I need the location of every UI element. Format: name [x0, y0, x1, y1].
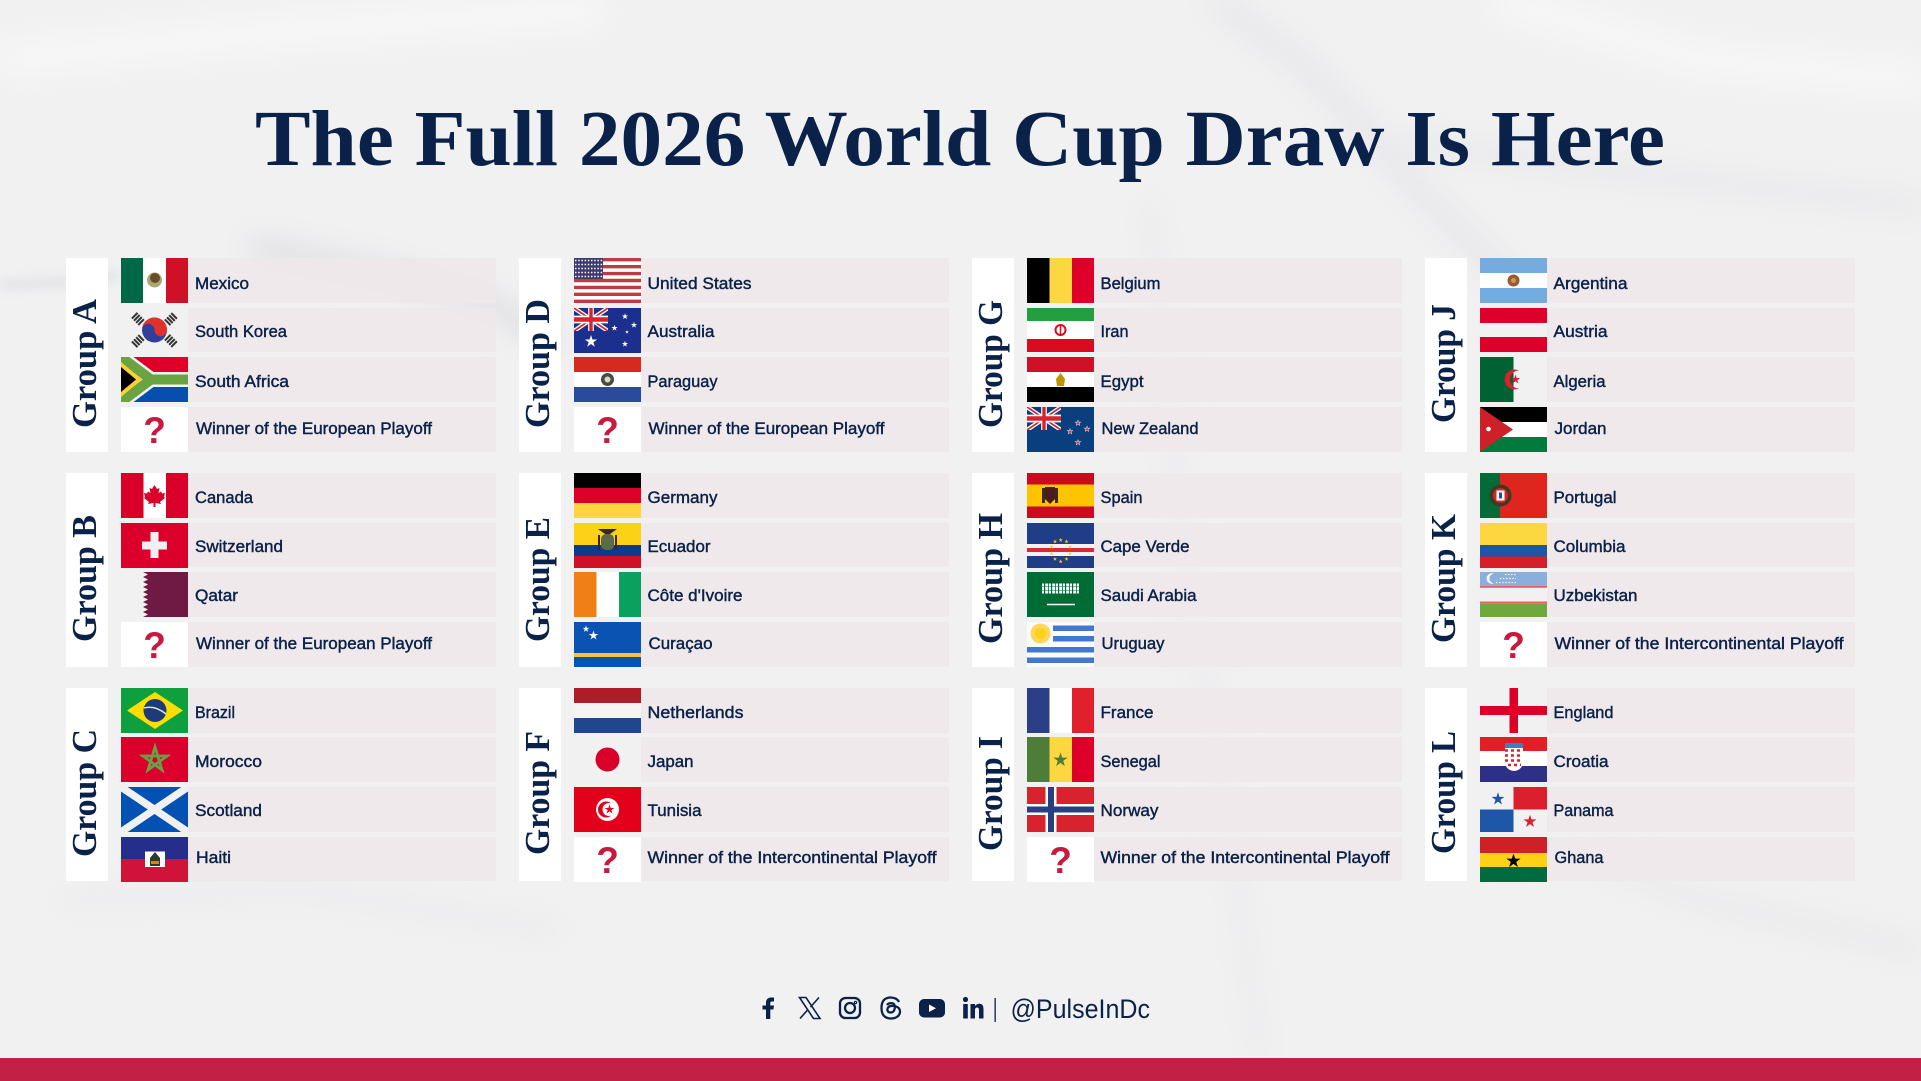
divider bar [994, 998, 996, 1022]
label: Uzbekistan: Uzbekistan [1554, 587, 1638, 605]
flag: unknown: ? [596, 410, 619, 451]
label: Saudi Arabia: Saudi Arabia [1100, 587, 1197, 605]
icon: X [800, 998, 820, 1018]
flag: Brazil [121, 688, 188, 733]
label: Morocco: Morocco [195, 753, 262, 771]
label: France: France [1100, 704, 1154, 722]
label: Netherlands: Netherlands [648, 704, 744, 722]
label: Croatia: Croatia [1554, 753, 1609, 771]
row: Haiti [121, 837, 496, 882]
label: Tunisia: Tunisia [648, 802, 702, 820]
row: Saudi Arabia [1027, 572, 1402, 617]
row: Austria [1480, 308, 1855, 352]
label: Winner of the Intercontinental Playoff: Winner of the Intercontinental Playoff [1554, 635, 1844, 653]
row: South Korea [134, 308, 496, 352]
flag: Germany [574, 473, 641, 518]
row: Columbia [1480, 523, 1855, 568]
handle: @PulseInDc [1010, 994, 1150, 1024]
flag: Haiti [121, 837, 188, 882]
flag: South Korea [131, 312, 178, 348]
row: Winner of the Intercontinental Playoff [1027, 837, 1402, 882]
row: Curaçao [574, 622, 949, 667]
row: Côte d'Ivoire [574, 572, 949, 617]
flag: Norway [1027, 787, 1094, 832]
row: Portugal [1480, 473, 1855, 518]
row: Qatar [143, 572, 496, 617]
label: England: England [1554, 704, 1614, 722]
row: Tunisia [574, 787, 949, 832]
row: Japan [596, 737, 949, 782]
label: Senegal: Senegal [1100, 753, 1160, 771]
flag: unknown [121, 622, 188, 667]
label: Côte d'Ivoire: Côte d'Ivoire [648, 587, 742, 605]
row: Scotland [121, 787, 496, 832]
flag: Scotland [121, 787, 188, 832]
row: Winner of the European Playoff [574, 407, 949, 452]
flag: Netherlands [574, 688, 641, 733]
flag: unknown [574, 407, 641, 452]
label: Winner of the European Playoff: Winner of the European Playoff [196, 420, 432, 438]
row: Germany [574, 473, 949, 518]
panel: Group G [971, 258, 1402, 452]
label: Qatar: Qatar [195, 587, 239, 605]
heading: Group H: Group H [971, 513, 1010, 644]
row: Winner of the European Playoff [121, 407, 496, 452]
label: Canada: Canada [195, 489, 254, 507]
flag: Paraguay [574, 357, 641, 402]
label: Columbia: Columbia [1554, 538, 1626, 556]
row: Winner of the Intercontinental Playoff [1480, 622, 1855, 667]
flag: unknown: ? [143, 625, 166, 666]
row: Ghana [1480, 837, 1855, 882]
panel: Group L [1424, 688, 1855, 882]
label: Algeria: Algeria [1554, 373, 1606, 391]
row: Mexico [121, 258, 496, 303]
flag: Canada [121, 473, 188, 518]
panel: Group I [971, 688, 1402, 882]
panel: Group D [518, 258, 949, 452]
label: New Zealand: New Zealand [1102, 420, 1198, 438]
label: Argentina: Argentina [1554, 275, 1628, 293]
flag: Columbia [1480, 523, 1547, 568]
row: Belgium [1027, 258, 1402, 303]
flag: unknown [121, 407, 188, 452]
row: Panama [1480, 787, 1855, 832]
panel: Group J [1424, 258, 1855, 452]
flag: unknown: ? [143, 410, 166, 451]
row: Egypt [1027, 357, 1402, 402]
icon: Threads [882, 998, 900, 1018]
flag: United States [574, 258, 641, 303]
row: Senegal [1027, 737, 1402, 782]
label: Switzerland: Switzerland [195, 538, 283, 556]
flag: Spain [1027, 473, 1094, 518]
row: Norway [1027, 787, 1402, 832]
heading: Group C: Group C [65, 729, 104, 857]
label: Norway: Norway [1100, 802, 1159, 820]
heading: Group J: Group J [1424, 304, 1463, 423]
label: Ghana: Ghana [1554, 849, 1604, 867]
label: Winner of the Intercontinental Playoff: Winner of the Intercontinental Playoff [648, 849, 937, 867]
flag: Panama [1480, 787, 1547, 832]
row: Australia [574, 308, 949, 353]
row: Croatia [1480, 737, 1855, 782]
heading: Group I: Group I [971, 736, 1010, 851]
label: Cape Verde: Cape Verde [1100, 538, 1190, 556]
flag: Portugal [1480, 473, 1547, 518]
flag: Ghana [1480, 837, 1547, 882]
row: Argentina [1480, 258, 1855, 303]
flag: Uruguay [1027, 622, 1094, 667]
label: Spain: Spain [1100, 489, 1142, 507]
label: Austria: Austria [1554, 323, 1608, 341]
flag: Egypt [1027, 357, 1094, 402]
flag: New Zealand [1027, 407, 1094, 452]
row: Netherlands [574, 688, 949, 733]
flag: unknown: ? [1049, 840, 1072, 881]
label: Japan: Japan [648, 753, 694, 771]
flag: Austria [1480, 308, 1547, 352]
flag: Croatia [1480, 737, 1547, 782]
flag: Cape Verde [1027, 523, 1094, 568]
flag: Switzerland [121, 523, 188, 568]
label: Iran: Iran [1100, 323, 1128, 341]
row: Jordan [1480, 407, 1855, 452]
label: Belgium: Belgium [1100, 275, 1160, 293]
flag: unknown [1027, 837, 1094, 882]
label: South Korea: South Korea [195, 323, 288, 341]
flag: England [1480, 688, 1547, 733]
flag: Curaçao [574, 622, 641, 667]
row: South Africa [121, 357, 496, 402]
label: Winner of the European Playoff: Winner of the European Playoff [648, 420, 885, 438]
label: Curaçao: Curaçao [648, 635, 712, 653]
flag: Côte d'Ivoire [574, 572, 641, 617]
label: Germany: Germany [648, 489, 718, 507]
label: Mexico: Mexico [195, 275, 249, 293]
panel: Group C [65, 688, 496, 882]
row: Paraguay [574, 357, 949, 402]
panel: Group F [518, 688, 949, 882]
heading: Group F: Group F [518, 731, 557, 855]
flag: France [1027, 688, 1094, 733]
flag: Belgium [1027, 258, 1094, 303]
row: Canada [121, 473, 496, 518]
flag: Australia [574, 308, 641, 353]
icon: Instagram [840, 998, 860, 1018]
flag: Iran [1027, 308, 1094, 353]
label: Australia: Australia [648, 323, 715, 341]
heading: Group E: Group E [518, 517, 557, 642]
row: Brazil [121, 688, 496, 733]
flag: Senegal [1027, 737, 1094, 782]
heading: Group L: Group L [1424, 731, 1463, 854]
heading: Group A: Group A [65, 298, 104, 428]
flag: Saudi Arabia [1027, 572, 1094, 617]
panel: Group B [65, 473, 496, 667]
row: Uruguay [1027, 622, 1402, 667]
title: The Full 2026 World Cup Draw Is Here [255, 96, 1665, 183]
row: France [1027, 688, 1402, 733]
label: Portugal: Portugal [1554, 489, 1616, 507]
label: Paraguay: Paraguay [648, 373, 718, 391]
row: Morocco [121, 737, 496, 782]
label: South Africa: South Africa [195, 373, 290, 391]
heading: Group G: Group G [971, 300, 1010, 428]
heading: Group B: Group B [65, 515, 104, 642]
label: United States: United States [648, 275, 752, 293]
footer bar [0, 1058, 1921, 1081]
label: Panama: Panama [1554, 802, 1614, 820]
social footer [762, 994, 1150, 1024]
icon: YouTube [919, 999, 945, 1018]
row: United States [574, 258, 949, 303]
heading: Group K: Group K [1424, 514, 1463, 643]
flag: unknown [574, 837, 641, 882]
flag: Japan [596, 748, 620, 772]
label: Egypt: Egypt [1100, 373, 1144, 391]
label: Haiti: Haiti [196, 849, 231, 867]
panel: Group A [65, 258, 496, 452]
label: Scotland: Scotland [195, 802, 262, 820]
panel: Group E [518, 473, 949, 667]
flag: Uzbekistan [1480, 572, 1547, 617]
panel: Group H [971, 473, 1402, 667]
row: Switzerland [121, 523, 496, 568]
flag: Mexico [121, 258, 188, 303]
row: Uzbekistan [1480, 572, 1855, 617]
flag: Morocco [121, 737, 188, 782]
row: Winner of the Intercontinental Playoff [574, 837, 949, 882]
flag: Jordan [1480, 407, 1547, 452]
heading: Group D: Group D [518, 299, 557, 428]
row: Cape Verde [1027, 523, 1402, 568]
row: Winner of the European Playoff [121, 622, 496, 667]
label: Winner of the European Playoff: Winner of the European Playoff [196, 635, 432, 653]
row: Algeria [1480, 357, 1855, 402]
icon: LinkedIn [963, 997, 984, 1018]
label: Ecuador: Ecuador [648, 538, 711, 556]
row: Spain [1027, 473, 1402, 518]
flag: Qatar [143, 572, 188, 617]
flag: unknown: ? [596, 840, 619, 881]
label: Jordan: Jordan [1554, 420, 1606, 438]
row: England [1480, 688, 1855, 733]
flag: South Africa [121, 357, 188, 402]
label: Uruguay: Uruguay [1102, 635, 1165, 653]
icon: Facebook [762, 998, 774, 1019]
label: Brazil: Brazil [195, 704, 235, 722]
flag: unknown: ? [1502, 625, 1525, 666]
panel: Group K [1424, 473, 1855, 667]
label: Winner of the Intercontinental Playoff: Winner of the Intercontinental Playoff [1100, 849, 1390, 867]
flag: Algeria [1480, 357, 1520, 402]
flag: Argentina [1480, 258, 1547, 303]
row: New Zealand [1027, 407, 1402, 452]
row: Ecuador [574, 523, 949, 568]
row: Iran [1027, 308, 1402, 353]
flag: Ecuador [574, 523, 641, 568]
flag: unknown [1480, 622, 1547, 667]
flag: Tunisia [574, 787, 641, 832]
